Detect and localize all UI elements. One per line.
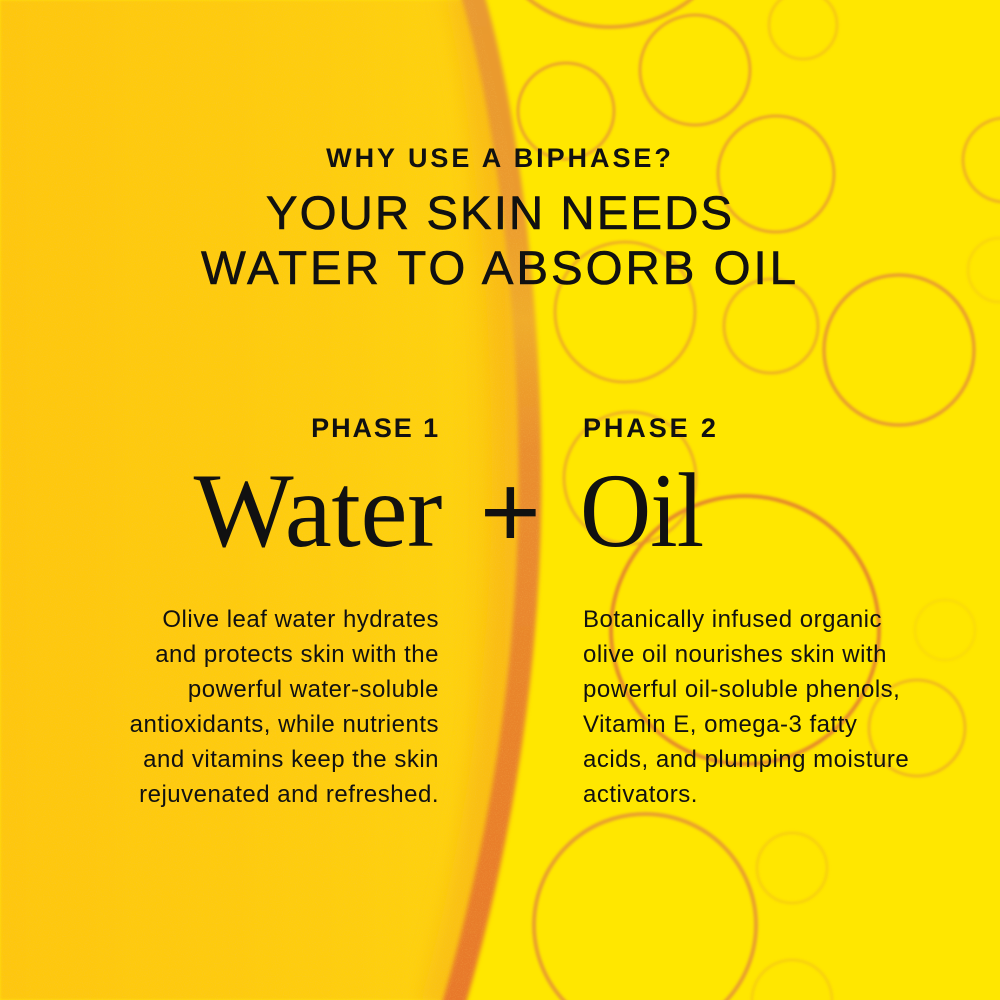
heading: title [200,187,799,295]
heading: title: WATER TO ABSORB OIL [201,242,799,295]
heading: oil: Oil [580,452,703,569]
text: water description: Olive leaf water hydrates [162,606,439,633]
text: oil description: olive oil nourishes skin with [583,641,887,668]
text: oil description [583,606,909,808]
bubbles [478,0,1000,1000]
text: water description: antioxidants, while nutrients [130,711,439,738]
text: water description: rejuvenated and refreshed. [139,781,439,808]
text: water description [130,606,439,808]
text: oil description: powerful oil-soluble phenols, [583,676,900,703]
symbol: plus: + [480,454,541,570]
text: water description: and protects skin with the [155,641,439,668]
text: water description: powerful water-soluble [188,676,439,703]
text: oil description: activators. [583,781,698,808]
label: phase 1: PHASE 1 [311,413,440,443]
label: phase 2: PHASE 2 [583,413,719,443]
text: water description: and vitamins keep the skin [143,746,439,773]
heading: eyebrow: WHY USE A BIPHASE? [326,143,674,173]
text: oil description: Botanically infused organic [583,606,882,633]
large droplet [0,0,544,1000]
heading: water: Water [194,452,442,569]
text: oil description: Vitamin E, omega-3 fatty [583,711,857,738]
heading: title: YOUR SKIN NEEDS [266,187,734,240]
text: oil description: acids, and plumping moisture [583,746,909,773]
